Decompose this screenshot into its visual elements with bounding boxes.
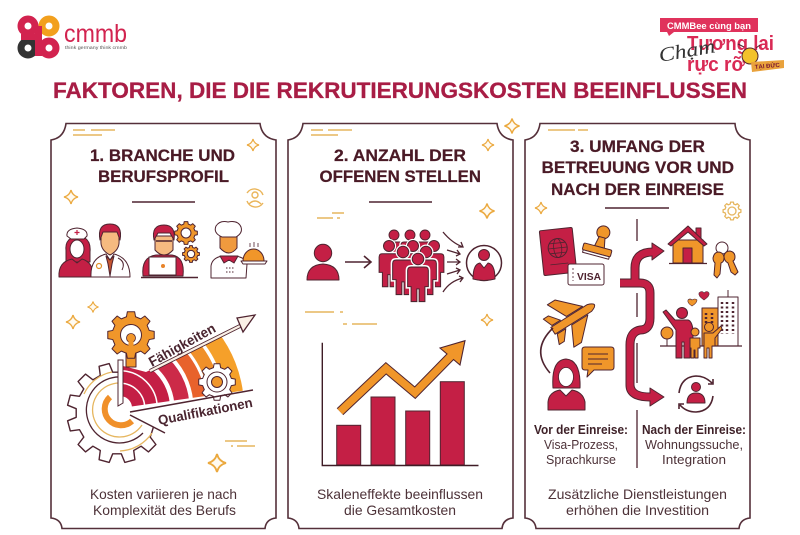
caption xyxy=(90,486,237,518)
label: qualifications: Qualifikationen xyxy=(157,395,254,428)
curved arc xyxy=(541,328,553,373)
text: after entry xyxy=(642,423,746,467)
caption: Komplexität des Berufs xyxy=(93,502,236,518)
campaign badge: TẠI ĐỨC xyxy=(755,62,781,71)
text: before entry: Sprachkurse xyxy=(546,453,616,467)
logo: cmmb: think germany think cmmb xyxy=(65,45,128,50)
icon: gold gear xyxy=(723,202,741,220)
caption xyxy=(548,486,727,518)
heading: 2. ANZAHL DER xyxy=(334,146,466,165)
icon: single person xyxy=(307,244,339,280)
heading: NACH DER EINREISE xyxy=(551,180,724,199)
divider xyxy=(636,219,638,468)
panel: Anzahl der offenen Stellen xyxy=(288,118,520,528)
icon: stamp xyxy=(582,222,618,259)
panel: Umfang der Betreuung xyxy=(525,124,750,528)
label: skills: Fähigkeiten xyxy=(146,320,218,370)
arrows converge xyxy=(443,232,463,292)
fan segments xyxy=(124,337,243,406)
icon: visa card xyxy=(568,264,604,285)
chart: skills and qualifications gear xyxy=(66,311,256,464)
logo: cmmb xyxy=(21,19,128,56)
arrow up xyxy=(150,315,255,371)
icon: family and city xyxy=(660,290,742,358)
icon: house xyxy=(668,226,707,264)
heading: BETREUUNG VOR UND xyxy=(542,158,734,177)
text: before entry xyxy=(534,423,628,467)
text: after entry: Integration xyxy=(662,453,726,467)
text: before entry: Vor der Einreise: xyxy=(534,423,628,437)
caption: erhöhen die Investition xyxy=(566,502,709,518)
arrow xyxy=(345,256,371,268)
top gear with stem xyxy=(108,312,154,406)
caption: Zusätzliche Dienstleistungen xyxy=(548,486,727,502)
lower rays xyxy=(130,390,253,433)
text: after entry: Wohnungssuche, xyxy=(645,438,743,452)
heading xyxy=(320,146,481,186)
icon: group of people xyxy=(379,230,444,302)
icon: nurse and doctor xyxy=(59,224,130,277)
icon: passport xyxy=(539,227,577,276)
icon: woman with speech bubble xyxy=(548,347,614,410)
caption xyxy=(317,486,483,518)
heading: OFFENEN STELLEN xyxy=(320,167,481,186)
sparkles xyxy=(480,118,520,326)
small gear xyxy=(199,364,235,400)
logo: cmmb: cmmb xyxy=(64,20,127,48)
icon: airplane xyxy=(538,284,608,353)
sparkle xyxy=(535,202,547,214)
text: after entry: Nach der Einreise: xyxy=(642,423,746,437)
icon: keys xyxy=(713,242,738,278)
campaign badge: rực rỡ xyxy=(687,54,746,76)
icon: user cycle xyxy=(247,189,263,207)
heading xyxy=(542,137,734,199)
caption: Kosten variieren je nach xyxy=(90,486,237,502)
campaign badge: CMMBee cùng bạn xyxy=(667,21,751,32)
sparkles xyxy=(64,139,259,472)
icon: IT worker with gears xyxy=(141,222,199,278)
campaign badge: Tương lai xyxy=(687,33,774,55)
panel: Branche und Berufsprofil xyxy=(50,122,277,530)
heading: BERUFSPROFIL xyxy=(98,167,229,186)
campaign badge: Chạm xyxy=(657,35,717,67)
arrow: branching path xyxy=(620,243,664,406)
text: before entry: Visa-Prozess, xyxy=(544,438,618,452)
icon: visa card: VISA xyxy=(577,271,601,283)
campaign badge xyxy=(657,18,784,76)
icon: selected candidate xyxy=(466,246,502,280)
icon: person with cycle arrows xyxy=(679,376,713,412)
caption: Skaleneffekte beeinflussen xyxy=(317,486,483,502)
title: FAKTOREN, DIE DIE REKRUTIERUNGSKOSTEN BEEINFLUSSEN xyxy=(53,78,747,103)
heading xyxy=(90,146,235,186)
chart: bars with rising arrow xyxy=(322,341,478,466)
heading: 3. UMFANG DER xyxy=(570,137,705,156)
heading: 1. BRANCHE UND xyxy=(90,146,235,165)
caption: die Gesamtkosten xyxy=(344,502,456,518)
icon: chef xyxy=(211,222,267,278)
large gear xyxy=(68,300,270,462)
